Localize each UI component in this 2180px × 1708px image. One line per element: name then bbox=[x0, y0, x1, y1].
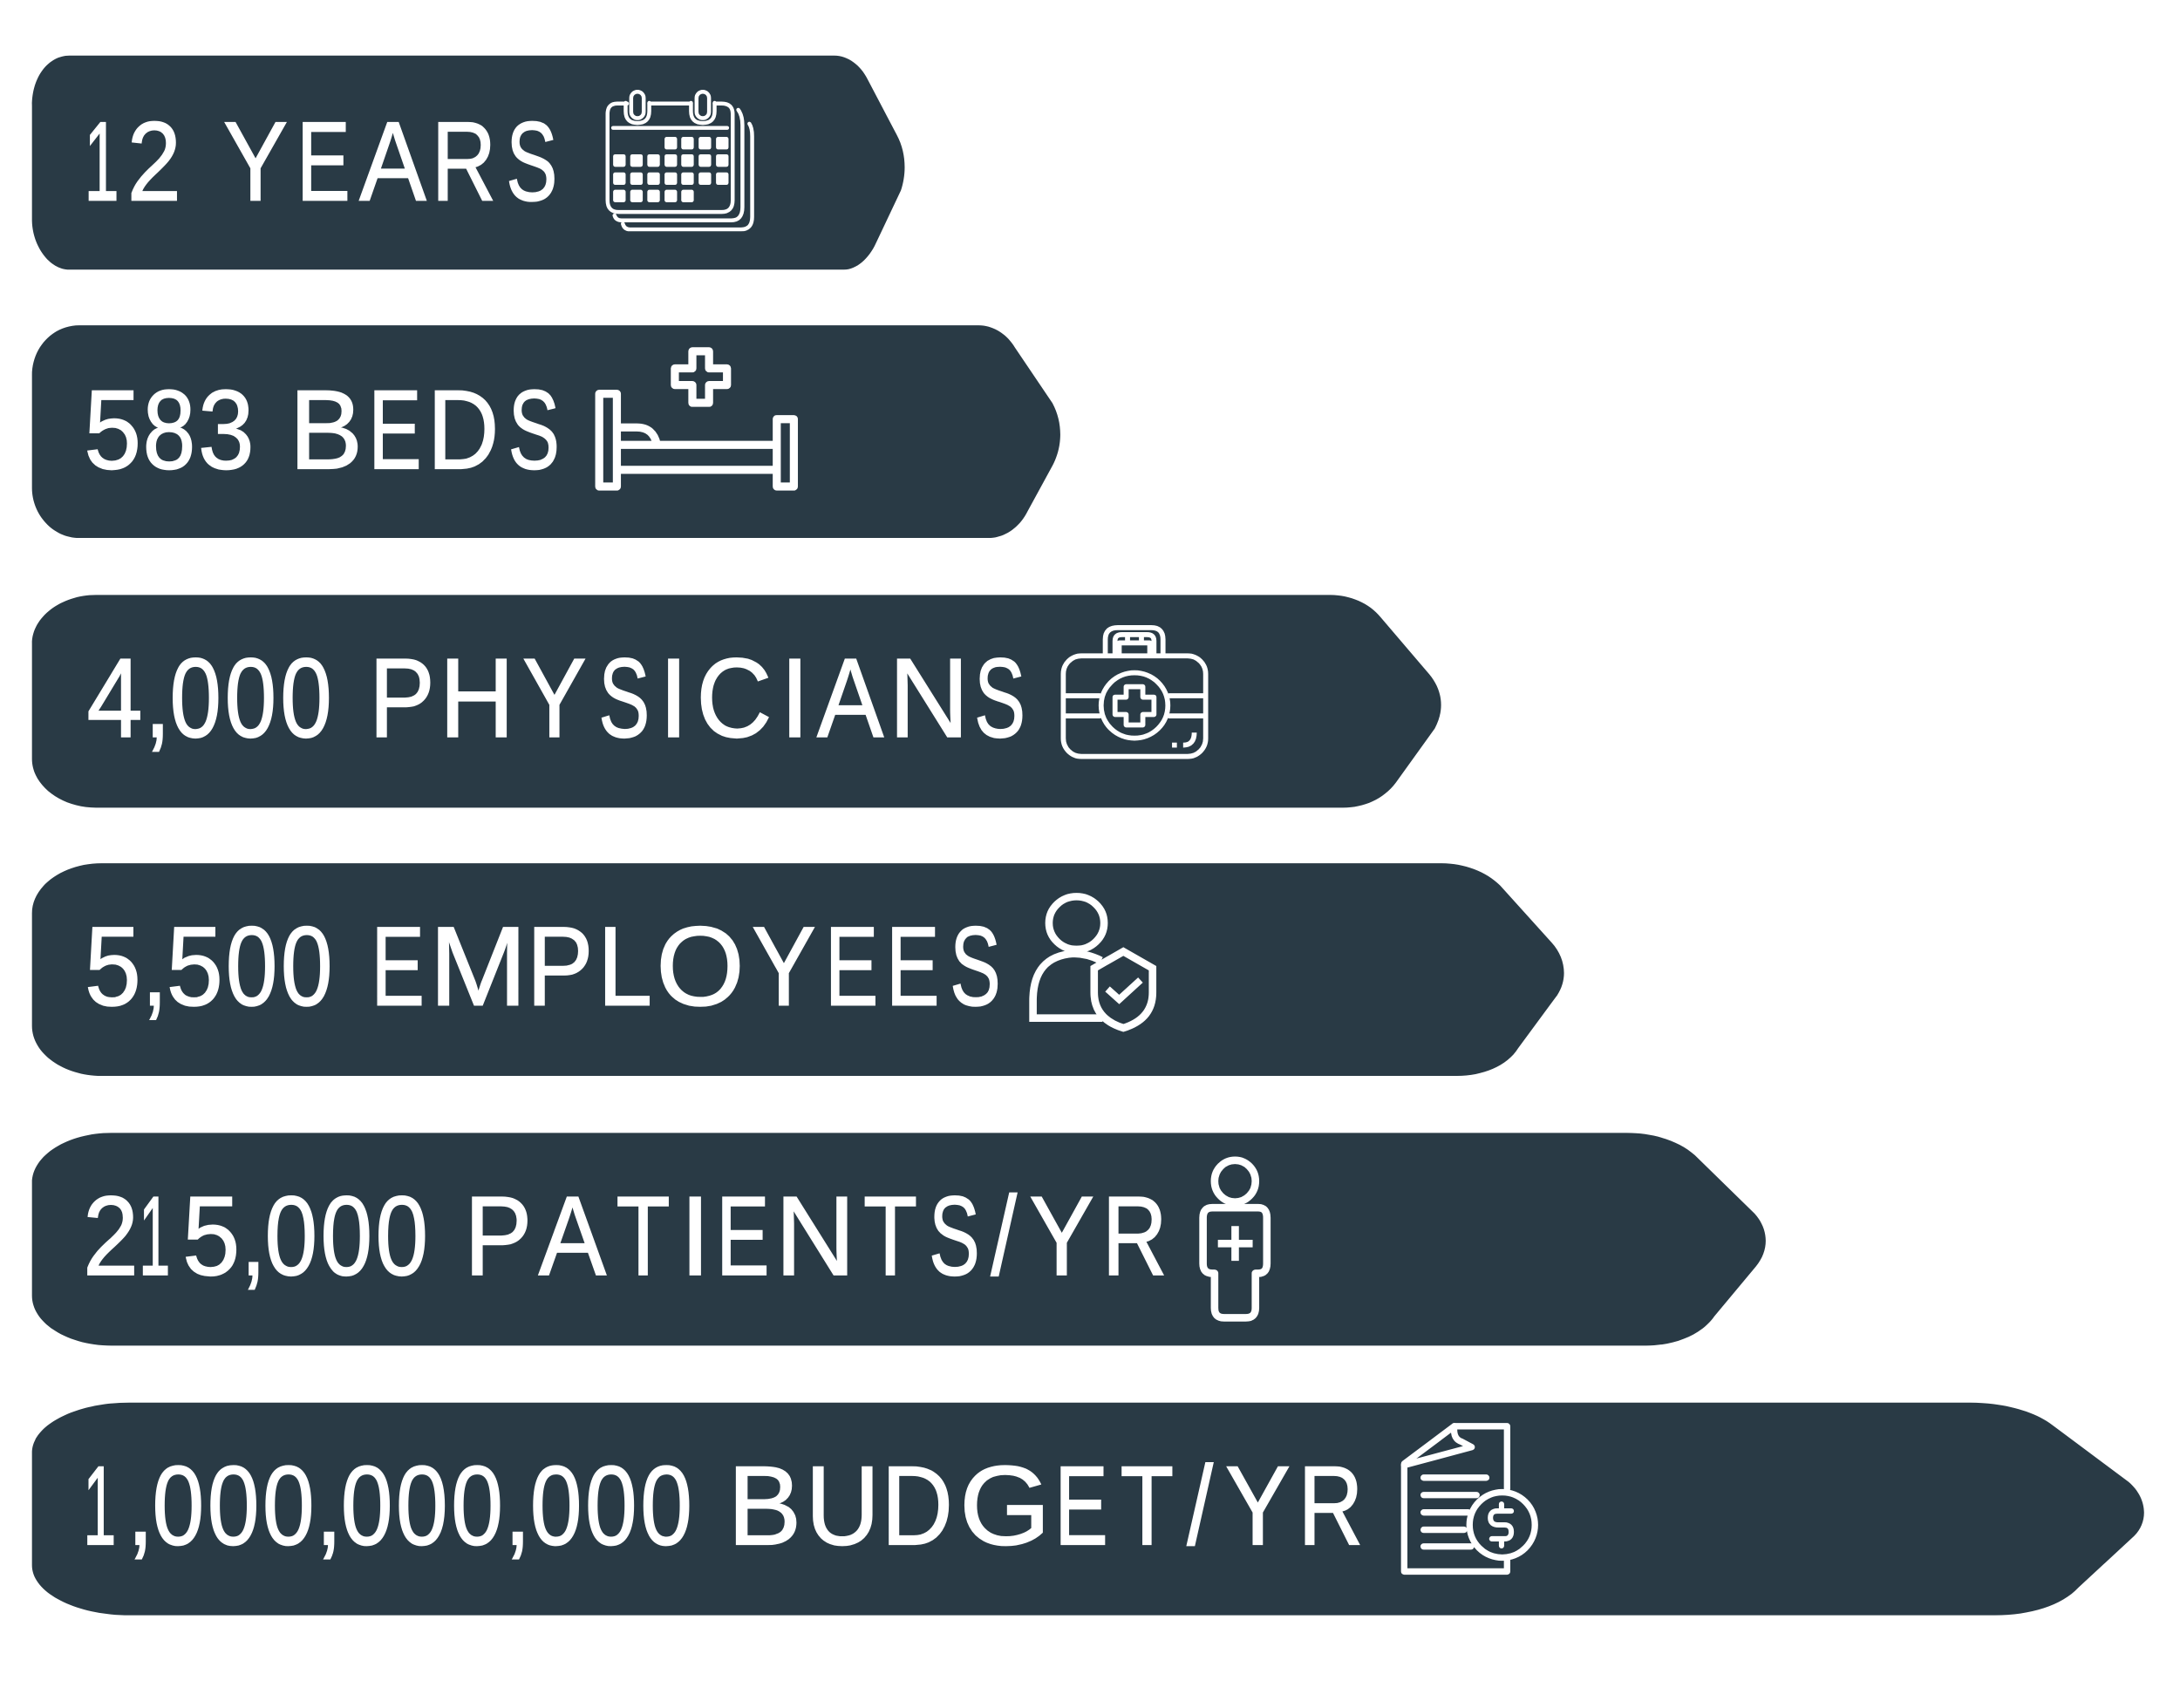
label: 4,000 physicians: C bbox=[696, 636, 773, 761]
label: 5,500 employees: E bbox=[825, 904, 878, 1030]
label: 1,000,000,000 budget per year: 0 bbox=[396, 1443, 448, 1569]
label: 4,000 physicians: 4 bbox=[86, 636, 143, 761]
label: 4,000 physicians: 0 bbox=[225, 636, 276, 761]
label: 5,500 employees: M bbox=[429, 904, 528, 1030]
label: 4,000 physicians: Y bbox=[522, 636, 587, 761]
label: 583 beds: 8 bbox=[143, 367, 195, 493]
label: 1,000,000,000 budget per year: U bbox=[806, 1443, 880, 1569]
label: 1,000,000,000 budget per year: , bbox=[127, 1443, 153, 1569]
arrow bar bbox=[32, 56, 904, 269]
arrow bar bbox=[32, 325, 1060, 538]
label: 5,500 employees: L bbox=[597, 904, 652, 1030]
label: 5,500 employees: P bbox=[527, 904, 593, 1030]
icon: employee with shield bbox=[1033, 896, 1153, 1028]
label: 12 years: S bbox=[506, 99, 557, 225]
label: 1,000,000,000 budget per year: 0 bbox=[208, 1443, 260, 1569]
label: 12 years: A bbox=[359, 99, 426, 225]
label: 5,500 employees: S bbox=[950, 904, 1001, 1030]
panel: 583 beds bbox=[32, 325, 1060, 538]
label: 4,000 physicians: I bbox=[659, 636, 688, 761]
label: 215,000 patients per year: E bbox=[716, 1174, 769, 1299]
label: 5,500 employees: E bbox=[886, 904, 939, 1030]
label: 215,000 patients per year: S bbox=[929, 1174, 980, 1299]
label: 215,000 patients per year: A bbox=[539, 1174, 606, 1299]
label: 215,000 patients per year: 0 bbox=[265, 1174, 317, 1299]
label: 1,000,000,000 budget per year: 0 bbox=[451, 1443, 503, 1569]
label: 1,000,000,000 budget per year: 0 bbox=[152, 1443, 204, 1569]
icon: medical kit bbox=[1063, 628, 1206, 757]
label: 1,000,000,000 budget per year: 0 bbox=[640, 1443, 692, 1569]
icon: budget document with coin bbox=[1404, 1426, 1535, 1571]
label: 583 beds: B bbox=[289, 367, 363, 493]
label: 12 years: 1 bbox=[85, 99, 119, 225]
label: 215,000 patients per year: P bbox=[464, 1174, 532, 1299]
panel: 1,000,000,000 budget per year bbox=[32, 1403, 2144, 1616]
label: 1,000,000,000 budget per year: G bbox=[959, 1443, 1051, 1569]
icon: calendar bbox=[608, 92, 753, 229]
label: 4,000 physicians: 0 bbox=[170, 636, 221, 761]
label: 583 beds: 3 bbox=[198, 367, 255, 493]
label: 215,000 patients per year: 5 bbox=[182, 1174, 240, 1299]
label: 4,000 physicians: P bbox=[369, 636, 435, 761]
panel: 5,500 employees bbox=[32, 863, 1564, 1076]
label: 583 beds: E bbox=[368, 367, 422, 493]
label: 1,000,000,000 budget per year: 1 bbox=[83, 1443, 116, 1569]
label: 5,500 employees: Y bbox=[752, 904, 816, 1030]
label: 4,000 physicians: H bbox=[439, 636, 514, 761]
label: 215,000 patients per year: 2 bbox=[83, 1174, 139, 1299]
label: 215,000 patients per year: 1 bbox=[139, 1174, 170, 1299]
label: 4,000 physicians: , bbox=[145, 636, 171, 761]
label: 1,000,000,000 budget per year: 0 bbox=[341, 1443, 393, 1569]
label: 1,000,000,000 budget per year: T bbox=[1121, 1443, 1174, 1569]
arrow bar bbox=[32, 1403, 2144, 1616]
label: 1,000,000,000 budget per year: 0 bbox=[262, 1443, 315, 1569]
label: 12 years: Y bbox=[223, 99, 288, 225]
label: 4,000 physicians: N bbox=[889, 636, 970, 761]
icon: patient bbox=[1203, 1160, 1267, 1317]
label: 12 years: 2 bbox=[127, 99, 181, 225]
label: 215,000 patients per year: , bbox=[241, 1174, 266, 1299]
label: 5,500 employees: O bbox=[656, 904, 745, 1030]
arrow bar bbox=[32, 595, 1441, 807]
label: 4,000 physicians: S bbox=[598, 636, 650, 761]
label: 215,000 patients per year: 0 bbox=[321, 1174, 372, 1299]
label: 215,000 patients per year: / bbox=[991, 1174, 1017, 1299]
label: 12 years: E bbox=[296, 99, 351, 225]
label: 5,500 employees: 0 bbox=[281, 904, 333, 1030]
label: 1,000,000,000 budget per year: 0 bbox=[585, 1443, 637, 1569]
label: 583 beds: 5 bbox=[84, 367, 141, 493]
panel: 12 years bbox=[32, 56, 904, 269]
label: 12 years: R bbox=[432, 99, 496, 225]
label: 1,000,000,000 budget per year: , bbox=[316, 1443, 343, 1569]
label: 215,000 patients per year: T bbox=[863, 1174, 917, 1299]
panel: 4,000 physicians bbox=[32, 595, 1441, 807]
label: 5,500 employees: 0 bbox=[226, 904, 277, 1030]
label: 4,000 physicians: A bbox=[817, 636, 883, 761]
label: 1,000,000,000 budget per year: R bbox=[1298, 1443, 1363, 1569]
label: 215,000 patients per year: N bbox=[775, 1174, 855, 1299]
label: 1,000,000,000 budget per year: / bbox=[1187, 1443, 1213, 1569]
arrow bar bbox=[32, 1133, 1766, 1345]
label: 5,500 employees: E bbox=[371, 904, 425, 1030]
panel: 215,000 patients per year bbox=[32, 1133, 1766, 1345]
label: 1,000,000,000 budget per year: B bbox=[727, 1443, 801, 1569]
arrow bar bbox=[32, 863, 1564, 1076]
label: 4,000 physicians: 0 bbox=[280, 636, 332, 761]
icon: hospital bed bbox=[599, 351, 794, 487]
label: 215,000 patients per year: R bbox=[1102, 1174, 1168, 1299]
label: 1,000,000,000 budget per year: D bbox=[882, 1443, 953, 1569]
label: 5,500 employees: 5 bbox=[167, 904, 223, 1030]
label: 1,000,000,000 budget per year: E bbox=[1054, 1443, 1108, 1569]
label: 5,500 employees: 5 bbox=[85, 904, 141, 1030]
label: 1,000,000,000 budget per year: , bbox=[504, 1443, 531, 1569]
label: 4,000 physicians: S bbox=[974, 636, 1025, 761]
label: 215,000 patients per year: Y bbox=[1029, 1174, 1094, 1299]
label: 1,000,000,000 budget per year: Y bbox=[1225, 1443, 1291, 1569]
label: 583 beds: S bbox=[508, 367, 560, 493]
label: 583 beds: D bbox=[427, 367, 499, 493]
label: 1,000,000,000 budget per year: 0 bbox=[530, 1443, 582, 1569]
label: 215,000 patients per year: T bbox=[616, 1174, 671, 1299]
label: 4,000 physicians: I bbox=[780, 636, 809, 761]
label: 5,500 employees: , bbox=[142, 904, 167, 1030]
label: 215,000 patients per year: 0 bbox=[375, 1174, 428, 1299]
label: 215,000 patients per year: I bbox=[680, 1174, 711, 1299]
